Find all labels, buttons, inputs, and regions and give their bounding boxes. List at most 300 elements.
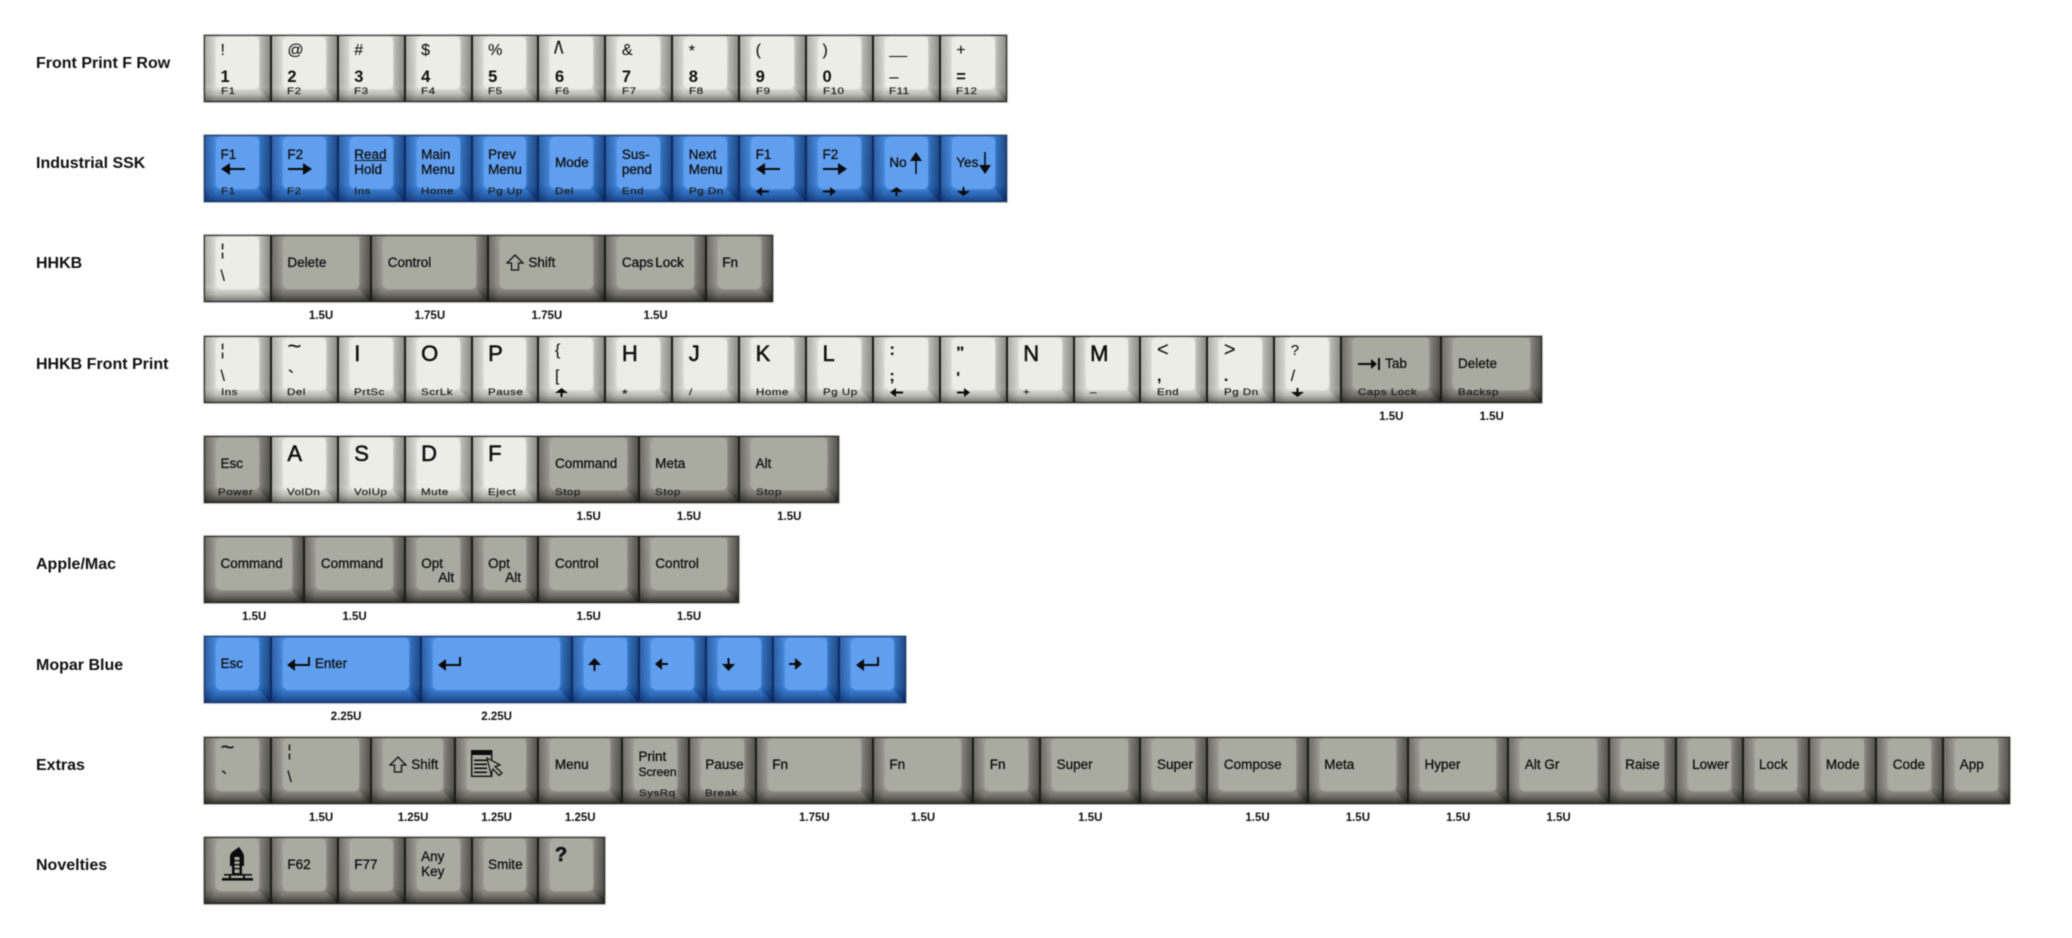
- key: Opt Alt: [472, 536, 538, 603]
- key: 3: F3: [354, 86, 369, 97]
- key: slash: [1274, 336, 1341, 403]
- key: K: [739, 336, 806, 403]
- key: 0: F10: [823, 86, 844, 97]
- key row: Apple/Mac: [202, 534, 740, 623]
- text: 1.75U: [532, 310, 562, 322]
- key: tilde: [271, 336, 338, 403]
- key: Opt Alt: Opt: [488, 556, 510, 571]
- key: minus: __: [889, 40, 907, 58]
- key: Meta: [1308, 736, 1408, 804]
- key: Menu icon: [455, 736, 538, 804]
- icon: small left arrow: [890, 388, 904, 398]
- key: pipe: Ins: [220, 387, 237, 398]
- key: Command: Command: [321, 556, 383, 571]
- key: 8: [672, 35, 739, 102]
- key: minus: F11: [889, 86, 910, 97]
- key: Down: [706, 636, 773, 703]
- key: I: [338, 336, 405, 403]
- key: F2 right alt: F2: [823, 147, 838, 162]
- icon: shift arrow: [388, 756, 408, 774]
- key: Esc: Esc: [220, 656, 243, 671]
- key: Meta: Stop: [655, 487, 681, 498]
- key: Super: [1140, 736, 1207, 804]
- key: semicolon: ;: [889, 368, 895, 385]
- key: Suspend: pend: [622, 162, 652, 177]
- key: No up: No: [889, 155, 907, 170]
- key: Opt Alt: Opt: [421, 556, 443, 571]
- key: Super: [1040, 736, 1140, 804]
- key: I: PrtSc: [354, 387, 385, 398]
- key: Fn: [873, 736, 973, 804]
- key: period: Pg Dn: [1224, 387, 1259, 398]
- key: Esc: [204, 636, 271, 703]
- key: Alt Gr: Alt Gr: [1525, 756, 1559, 772]
- key: K: Home: [756, 387, 789, 398]
- text: 1.5U: [242, 611, 266, 623]
- key: 9: 9: [756, 68, 765, 86]
- key: Print Screen: Print: [639, 748, 666, 764]
- key: F1 left: F1: [220, 147, 236, 162]
- key: 9: F9: [756, 86, 770, 97]
- key: slash: ?: [1291, 342, 1299, 359]
- key: K: K: [756, 341, 770, 366]
- key: Command: Stop: [555, 487, 581, 498]
- key: Lock: [1743, 736, 1809, 804]
- row label: Novelties: Novelties: [36, 857, 107, 874]
- key row: Front Print F Row: [202, 34, 1008, 104]
- key: 6: F6: [555, 86, 569, 97]
- key: tilde: `: [220, 767, 228, 792]
- row label: Apple/Mac: Apple/Mac: [36, 556, 116, 572]
- key: F62: [271, 837, 338, 904]
- key: Compose: Compose: [1224, 756, 1282, 772]
- icon: up arrow: [588, 658, 602, 672]
- text: 1.5U: [342, 611, 367, 623]
- key: bracket: {: [555, 342, 560, 359]
- key: 5: F5: [488, 86, 503, 97]
- icon: down arrow: [978, 151, 992, 174]
- key: Opt Alt: Alt: [505, 570, 521, 585]
- key row: HHKB Front Print bottom: [202, 434, 840, 523]
- key: Main Menu: Menu: [421, 162, 455, 177]
- key: Control: [639, 536, 739, 603]
- key: App: App: [1960, 756, 1984, 772]
- text: 1.5U: [1379, 411, 1403, 423]
- key: J: [672, 336, 739, 403]
- text: 1.5U: [309, 812, 333, 824]
- key: Any Key: Any: [421, 849, 444, 864]
- key: Caps Lock: Caps Lock: [622, 255, 684, 270]
- icon: right arrow: [822, 162, 848, 176]
- text: 1.5U: [1078, 812, 1102, 824]
- key: Any Key: [405, 837, 472, 904]
- key: Next Menu: Next: [689, 147, 716, 162]
- icon: right arrow: [788, 658, 802, 670]
- key: M: M: [1090, 341, 1108, 366]
- key row: HHKB Front Print top: [202, 333, 1544, 423]
- key: pipe: ¦: [287, 743, 292, 760]
- key: Command: [538, 436, 639, 503]
- text: 2.25U: [481, 711, 512, 723]
- key: Pause: Break: [705, 788, 738, 798]
- key: F1 left alt: F1: [756, 147, 771, 162]
- key: question mark: ?: [555, 844, 567, 866]
- text: 1.5U: [576, 611, 601, 623]
- key: Lock: Lock: [1759, 756, 1788, 772]
- key: Main Menu: [405, 135, 472, 202]
- key: Mode: Del: [555, 186, 574, 197]
- key: J: /: [689, 387, 692, 398]
- key: Up: [572, 636, 639, 703]
- key: F: [472, 436, 538, 503]
- row label: Mopar Blue: Mopar Blue: [36, 657, 123, 674]
- key: P: P: [488, 341, 503, 366]
- key: 0: 0: [823, 68, 832, 86]
- icon: left arrow: [756, 162, 781, 176]
- key row: HHKB: [202, 234, 774, 322]
- key: 1: 1: [220, 68, 230, 86]
- key: F1 left: F1: [220, 186, 235, 197]
- key: S: [338, 436, 405, 503]
- key: pipe: \: [220, 368, 225, 385]
- icon: down arrow: [722, 657, 736, 672]
- row label: Industrial SSK: Industrial SSK: [36, 155, 145, 172]
- key: tilde: Del: [287, 387, 306, 398]
- key: O: ScrLk: [421, 387, 453, 398]
- key: Tab: Tab: [1385, 356, 1407, 371]
- key: Super: Super: [1157, 756, 1193, 772]
- key: H: *: [622, 387, 628, 401]
- key: I: I: [354, 341, 360, 366]
- key: 5: 5: [488, 68, 497, 86]
- key row: Industrial SSK: [202, 134, 1008, 204]
- key: Suspend: Sus-: [622, 147, 650, 162]
- text: 1.5U: [1480, 411, 1504, 423]
- key: Yes down: [940, 135, 1007, 202]
- key: 1: [204, 35, 271, 102]
- key: Super: Super: [1057, 756, 1093, 772]
- key: tilde: `: [287, 366, 295, 391]
- key: semicolon: [873, 336, 940, 403]
- key: Control: Control: [388, 255, 431, 270]
- key: S: S: [354, 441, 369, 466]
- key: Esc: [204, 436, 271, 503]
- key: bracket: [: [555, 368, 559, 385]
- key: 0: [806, 35, 873, 102]
- key: Fn: Fn: [722, 255, 738, 270]
- key: S: VolUp: [354, 487, 388, 498]
- key: Yes down: Yes: [956, 155, 978, 170]
- key: equals: +: [956, 42, 966, 58]
- key: No up: [873, 135, 940, 202]
- key: F2 right: F2: [287, 147, 303, 162]
- key: 7: F7: [622, 86, 636, 97]
- key: Main Menu: Home: [421, 186, 454, 197]
- icon: small down arrow: [1290, 387, 1304, 398]
- key: F: F: [488, 441, 502, 466]
- key: 7: 7: [622, 68, 631, 86]
- key: Command: [304, 536, 405, 603]
- key: pipe: [204, 336, 271, 403]
- text: 1.5U: [1446, 812, 1470, 824]
- key: Pause: Pause: [705, 756, 744, 772]
- icon: shift arrow: [506, 254, 524, 272]
- key: Esc: Esc: [220, 456, 243, 471]
- text: 1.5U: [1346, 812, 1370, 824]
- key: Menu: [538, 736, 622, 804]
- key: pipe: \: [287, 769, 292, 786]
- text: 1.5U: [677, 511, 701, 523]
- text: 2.25U: [331, 711, 361, 723]
- key: Mode: Mode: [1826, 756, 1860, 772]
- key: D: Mute: [421, 487, 449, 498]
- key: Lower: Lower: [1692, 756, 1729, 772]
- key: Delete: Delete: [287, 255, 326, 270]
- key: bracket: [538, 336, 605, 403]
- key: Print Screen: [622, 736, 689, 804]
- key: Tab: [1341, 336, 1441, 403]
- key: equals: =: [956, 68, 966, 86]
- key: comma: ,: [1157, 368, 1161, 385]
- key: F77: F77: [354, 857, 378, 872]
- key: 2: @: [287, 42, 304, 58]
- key: Pause: [689, 736, 756, 804]
- key: 8: F8: [689, 86, 703, 97]
- icon: small up arrow: [554, 388, 568, 398]
- key: 4: $: [421, 42, 430, 58]
- icon: small right arrow: [822, 186, 836, 196]
- key: F1 left: [204, 135, 271, 202]
- key: Delete: [1441, 336, 1542, 403]
- key: equals: [940, 35, 1007, 102]
- key: comma: End: [1157, 387, 1179, 398]
- key: 3: 3: [354, 68, 363, 86]
- key: Hyper: Hyper: [1425, 756, 1461, 772]
- key: M: [1074, 336, 1140, 403]
- text: 1.5U: [1245, 812, 1270, 824]
- key: Left: [639, 636, 706, 703]
- key: 8: *: [689, 42, 695, 60]
- key: tilde: ~: [220, 734, 235, 760]
- row label: HHKB Front Print: HHKB Front Print: [36, 356, 168, 373]
- icon: up arrow: [910, 152, 922, 175]
- key: F1 left alt: [739, 135, 806, 202]
- key: Delete: Delete: [1458, 356, 1497, 371]
- text: 1.5U: [576, 511, 601, 523]
- key: Mode: Mode: [555, 155, 589, 170]
- key: 6: [538, 35, 605, 102]
- key: 9: (: [756, 42, 761, 58]
- key: quote: [940, 336, 1007, 403]
- key: quote: ': [956, 370, 960, 387]
- key: F2 right: [271, 135, 338, 202]
- key: minus: –: [889, 68, 899, 86]
- key: 8: 8: [689, 68, 698, 86]
- text: 1.5U: [309, 310, 333, 322]
- key: Shift: [488, 235, 605, 302]
- key: Main Menu: Main: [421, 147, 450, 162]
- key: pipe: ¦: [220, 242, 225, 259]
- key: N: +: [1023, 387, 1030, 398]
- icon: menu with cursor: [470, 749, 504, 778]
- key: Fn: [706, 235, 773, 302]
- key row: Mopar Blue: [202, 634, 908, 723]
- key: F2 right alt: [806, 135, 873, 202]
- text: 1.75U: [799, 812, 830, 824]
- key: P: [472, 336, 538, 403]
- key: pipe: \: [220, 268, 225, 285]
- key: H: [605, 336, 672, 403]
- key: Prev Menu: [472, 135, 538, 202]
- key: Lower: [1676, 736, 1743, 804]
- key: Enter: [271, 636, 421, 703]
- text: 1.75U: [414, 310, 445, 322]
- key: L: Pg Up: [823, 387, 857, 398]
- key: 6: ^: [554, 36, 563, 73]
- key: 3: #: [354, 42, 363, 58]
- key: Smite: [472, 837, 538, 904]
- key: 5: [472, 35, 538, 102]
- key: Read Hold: Hold: [354, 162, 382, 177]
- key: Prev Menu: Prev: [488, 147, 516, 162]
- key: L: [806, 336, 873, 403]
- key: F77: [338, 837, 405, 904]
- key: A: A: [287, 441, 302, 466]
- key row: Extras: [202, 734, 2012, 824]
- icon: small up arrow: [890, 186, 904, 197]
- key: Enter: Enter: [315, 656, 347, 671]
- key: question mark: [538, 837, 605, 904]
- key: Next Menu: [672, 135, 739, 202]
- key: Alt: Alt: [756, 456, 771, 471]
- icon: left arrow: [220, 162, 246, 176]
- key: 2: [271, 35, 338, 102]
- key: Code: [1876, 736, 1943, 804]
- key: A: VolDn: [287, 487, 321, 498]
- key: 9: [739, 35, 806, 102]
- key: Menu: Menu: [555, 756, 589, 772]
- key: Read Hold: Read: [354, 147, 387, 162]
- key: 4: F4: [421, 86, 436, 97]
- key: A: [271, 436, 338, 503]
- key: Command: [204, 536, 304, 603]
- key: 4: [405, 35, 472, 102]
- text: 1.5U: [643, 310, 668, 322]
- icon: right arrow: [287, 162, 312, 176]
- key: App: [1943, 736, 2010, 804]
- icon: return arrow: [856, 656, 880, 672]
- key: Control: Control: [555, 556, 598, 571]
- text: 1.5U: [911, 812, 935, 824]
- key: 3: [338, 35, 405, 102]
- key: O: O: [421, 341, 438, 366]
- icon: return arrow: [286, 656, 311, 672]
- key: Hyper: [1408, 736, 1508, 804]
- key: 2: F2: [287, 86, 302, 97]
- key: Opt Alt: [405, 536, 472, 603]
- key: quote: ": [956, 343, 964, 362]
- key: Fn: Fn: [772, 756, 788, 772]
- key: semicolon: :: [889, 340, 895, 359]
- key: Return small: [839, 636, 906, 703]
- icon: left arrow: [654, 658, 669, 670]
- text: 1.25U: [565, 812, 596, 824]
- icon: small left arrow: [756, 186, 770, 196]
- key: Smite: Smite: [488, 857, 523, 872]
- key: N: [1007, 336, 1074, 403]
- key row: Novelties: [202, 836, 606, 906]
- key: Raise: [1609, 736, 1676, 804]
- key: Print Screen: Screen: [639, 764, 677, 778]
- key: pipe: ¦: [220, 342, 225, 359]
- key: Fn: Fn: [990, 756, 1006, 772]
- key: 7: &: [622, 42, 633, 58]
- key: novelty icon: [204, 837, 271, 904]
- key: period: .: [1224, 368, 1228, 385]
- key: Fn: [756, 736, 873, 804]
- key: L: L: [823, 341, 835, 366]
- key: F2 right: F2: [287, 186, 302, 197]
- text: 1.5U: [677, 611, 701, 623]
- key: P: Pause: [488, 387, 523, 398]
- key: 0: ): [823, 42, 828, 58]
- key: 5: %: [488, 42, 502, 58]
- key: period: >: [1224, 339, 1236, 361]
- key: Shift: Shift: [528, 255, 555, 270]
- key: Mode: [1809, 736, 1876, 804]
- key: Suspend: [605, 135, 672, 202]
- key: pipe: [271, 736, 371, 804]
- key: Mode: [538, 135, 605, 202]
- key: minus: [873, 35, 940, 102]
- key: Next Menu: Pg Dn: [689, 186, 723, 197]
- key: Opt Alt: Alt: [438, 570, 454, 585]
- row label: Front Print F Row: Front Print F Row: [36, 55, 170, 72]
- key: Meta: [639, 436, 739, 503]
- key: Raise: Raise: [1625, 756, 1660, 772]
- key: Return: [421, 636, 572, 703]
- key: Read Hold: [338, 135, 405, 202]
- row label: HHKB: HHKB: [36, 255, 82, 272]
- key: Prev Menu: Menu: [488, 162, 522, 177]
- key: comma: <: [1157, 339, 1169, 361]
- key: Delete: Backsp: [1458, 387, 1499, 398]
- key: Delete: [271, 235, 371, 302]
- key: tilde: ~: [287, 333, 301, 360]
- key: Shift: Shift: [411, 756, 438, 772]
- key: Read Hold: Ins: [354, 186, 371, 197]
- key: pipe: [204, 235, 271, 302]
- key: Prev Menu: Pg Up: [488, 186, 523, 197]
- key: Meta: Meta: [1324, 756, 1354, 772]
- key: D: D: [421, 441, 437, 466]
- key: Esc: Power: [218, 487, 253, 498]
- key: Alt Gr: [1508, 736, 1609, 804]
- text: 1.25U: [398, 812, 428, 824]
- key: 7: [605, 35, 672, 102]
- key: F62: F62: [287, 857, 311, 872]
- key: tilde: [204, 736, 271, 804]
- icon: small right arrow: [956, 388, 970, 398]
- key: M: –: [1090, 387, 1097, 398]
- text: 1.25U: [481, 812, 512, 824]
- key: 6: 6: [555, 68, 564, 86]
- key: N: N: [1023, 341, 1039, 366]
- key: Fn: [973, 736, 1040, 804]
- key: Any Key: Key: [421, 864, 444, 879]
- text: 1.5U: [777, 511, 801, 523]
- key: Fn: Fn: [889, 756, 905, 772]
